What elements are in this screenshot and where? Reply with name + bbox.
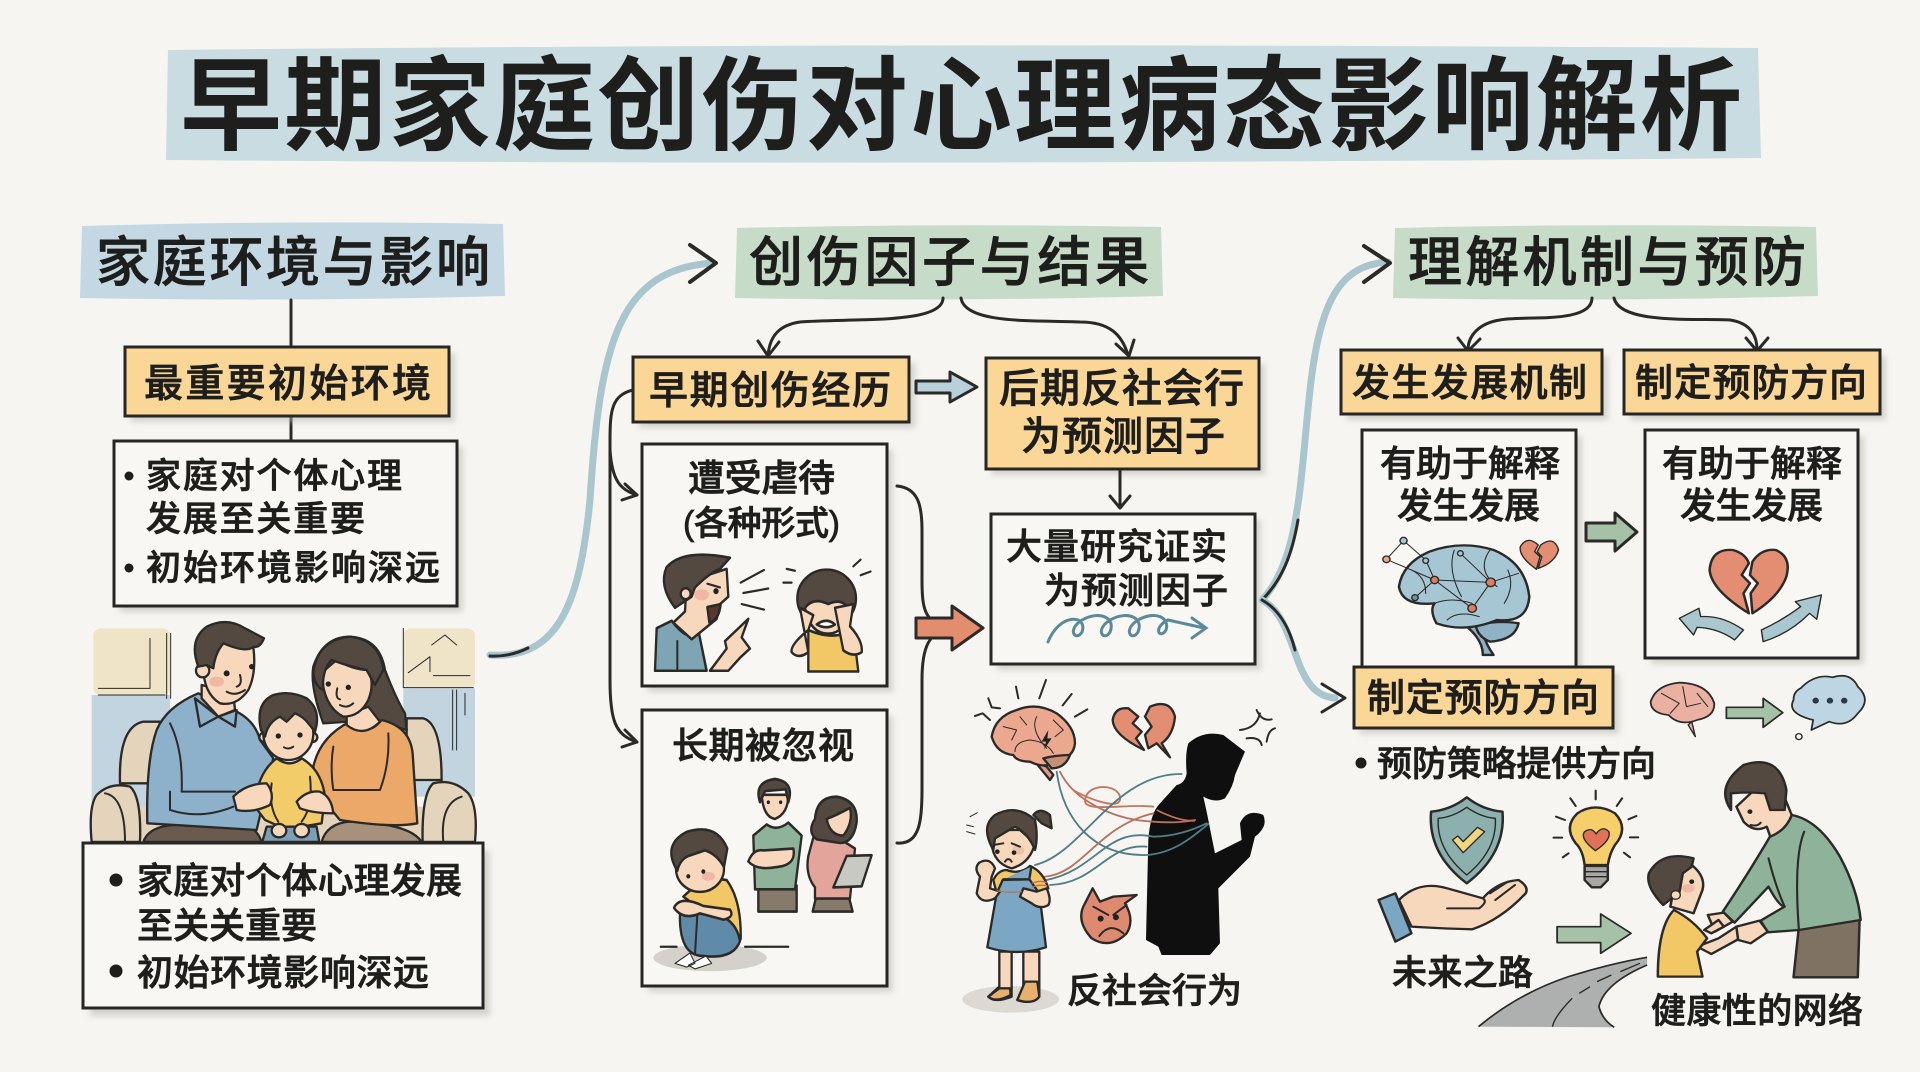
title: 早期家庭创伤对心理病态影响解析 (180, 50, 1742, 164)
box: predictor: 为预测因子 (1021, 415, 1225, 459)
child in yellow (1648, 856, 1768, 977)
label: antisocial behaviour: 反社会行为 (1067, 972, 1242, 1011)
panel: neglect (642, 710, 893, 992)
arrow: panels to research (916, 606, 983, 650)
label: healthy network: 健康性的网络 (1651, 992, 1863, 1031)
adult in green (1708, 762, 1861, 977)
road (1479, 957, 1647, 1027)
label: future road: 未来之路 (1392, 954, 1533, 993)
icon: brain (975, 680, 1087, 780)
icons: brain to speech bubble (1651, 676, 1865, 740)
arrow: family to trauma factors (490, 245, 716, 656)
bracket: panels to research (897, 486, 945, 843)
bullet: prevention strategy: 预防策略提供方向 (1377, 745, 1656, 784)
icon: broken heart with arrows (1679, 550, 1821, 642)
panel: explain development with brain: 发生发展 (1397, 485, 1540, 526)
silhouette figure (1146, 734, 1265, 955)
box: research confirmed (991, 514, 1261, 670)
heading: family environment: 家庭环境与影响 (96, 233, 490, 293)
icon: angry devil face (1081, 888, 1137, 943)
illustration: neglected child and distracted parents (653, 779, 872, 971)
illustration: shouting parent and crying child (655, 555, 871, 672)
arrows: fork to mechanism and prevention (1458, 298, 1768, 351)
text box: family summary: 家庭对个体心理发展 (137, 860, 462, 901)
girl with wires (962, 810, 1059, 1013)
panel: neglect: 长期被忽视 (672, 725, 854, 766)
box: most important initial environment: 最重要初始环境 (144, 363, 431, 406)
box: prevention direction: 制定预防方向 (1635, 363, 1867, 405)
panel: explain development with heart (1645, 430, 1864, 664)
panel: explain development with brain: 有助于解释 (1380, 443, 1560, 484)
text box: family importance: 家庭对个体心理 (146, 457, 402, 496)
box: most important initial environment (125, 347, 455, 422)
icon: broken heart (1113, 704, 1175, 757)
bracket arrows: early trauma to panels (610, 390, 637, 747)
text box: family summary (83, 843, 490, 1016)
arrow: green (1557, 914, 1631, 953)
heading: mechanisms and prevention: 理解机制与预防 (1408, 233, 1806, 293)
tangled wires (1035, 772, 1208, 885)
panel: abuse (642, 444, 893, 692)
text box: family importance: 发展至关重要 (146, 500, 365, 539)
box: early trauma: 早期创伤经历 (649, 370, 891, 413)
box: prevention direction banner: 制定预防方向 (1367, 678, 1599, 720)
panel: abuse: 遭受虐待 (688, 458, 835, 499)
arrow: predictor to research (1110, 471, 1130, 508)
icon: lightbulb with heart (1554, 791, 1638, 887)
icon: open hand (1379, 880, 1527, 942)
icon: anger mark (1240, 710, 1275, 745)
icon: shield (1431, 797, 1503, 883)
arrow: mechanism to prevention (1586, 513, 1637, 551)
icon: blue brain network (1383, 537, 1559, 655)
arrows: research to mechanism and prevention (1262, 246, 1390, 712)
box: predictor: 后期反社会行 (999, 367, 1244, 411)
box: predictor (986, 358, 1265, 475)
illustration: protective hand, lightbulb, parent and child (1379, 762, 1861, 1027)
squiggle arrow (1048, 615, 1206, 642)
panel: explain development with heart: 有助于解释 (1662, 443, 1842, 484)
text box: family importance: 初始环境影响深远 (146, 549, 440, 588)
text box: family summary: 初始环境影响深远 (137, 952, 429, 993)
text box: family summary: 至关关重要 (137, 905, 317, 946)
panel: abuse: (各种形式) (683, 505, 840, 543)
box: prevention direction (1624, 350, 1886, 420)
heading: trauma factors: 创伤因子与结果 (749, 233, 1149, 293)
illustration: family on sofa (91, 622, 476, 842)
box: prevention direction banner (1354, 667, 1619, 734)
box: developmental mechanism: 发生发展机制 (1352, 363, 1587, 405)
text box: family importance (114, 441, 463, 612)
panel: explain development with heart: 发生发展 (1680, 485, 1823, 526)
arrows: fork to trauma and outcome (758, 298, 1134, 356)
box: developmental mechanism (1341, 350, 1608, 420)
box: research confirmed: 大量研究证实 (1006, 526, 1227, 567)
illustration: antisocial behaviour (962, 680, 1275, 1013)
box: research confirmed: 为预测因子 (1044, 570, 1228, 611)
arrow: trauma to predictor (916, 372, 977, 402)
panel: explain development with brain (1362, 430, 1582, 676)
box: early trauma (633, 357, 915, 428)
connector: heading to first box (290, 300, 292, 441)
